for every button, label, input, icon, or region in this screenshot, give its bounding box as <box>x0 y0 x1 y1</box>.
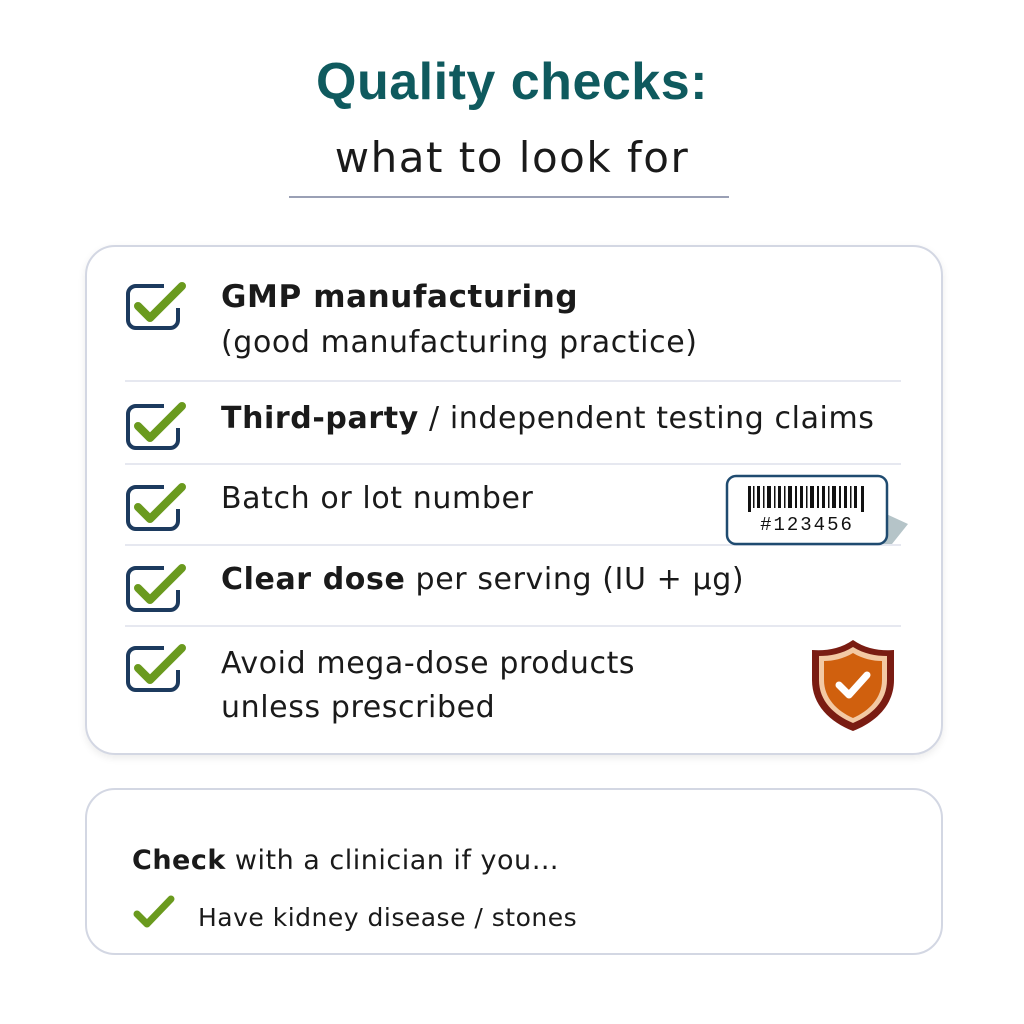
text: GMP: GMP manufacturing <box>221 279 578 315</box>
text: (good manufacturing practice) <box>221 325 698 360</box>
panel: clinician <box>85 788 943 955</box>
panel: quality checklist <box>85 245 943 755</box>
text: third-party: Third-party / independent testing claims <box>221 401 875 436</box>
text: avoid mega-dose: Avoid mega-dose products <box>221 646 635 681</box>
text: kidney: Have kidney disease / stones <box>198 903 577 932</box>
icon: checkbox 4 <box>126 564 186 612</box>
text: avoid mega-dose <box>221 646 635 725</box>
text: clinician heading: Check with a clinician if you… <box>132 845 559 876</box>
icon: small check <box>134 896 174 928</box>
title: Quality checks: <box>316 53 708 111</box>
icon: barcode label <box>726 474 908 546</box>
icon: checkbox 3 <box>126 483 186 531</box>
icon: barcode label: #123456 <box>760 514 854 536</box>
subtitle: what to look for <box>335 133 689 182</box>
icon: shield <box>812 640 894 731</box>
icon: checkbox 1 <box>126 282 186 330</box>
text: batch: Batch or lot number <box>221 481 533 516</box>
icon: checkbox 5 <box>126 644 186 692</box>
icon: checkbox 2 <box>126 402 186 450</box>
text: clear dose: Clear dose per serving (IU + μg) <box>221 562 744 597</box>
text: avoid mega-dose: unless prescribed <box>221 690 495 725</box>
